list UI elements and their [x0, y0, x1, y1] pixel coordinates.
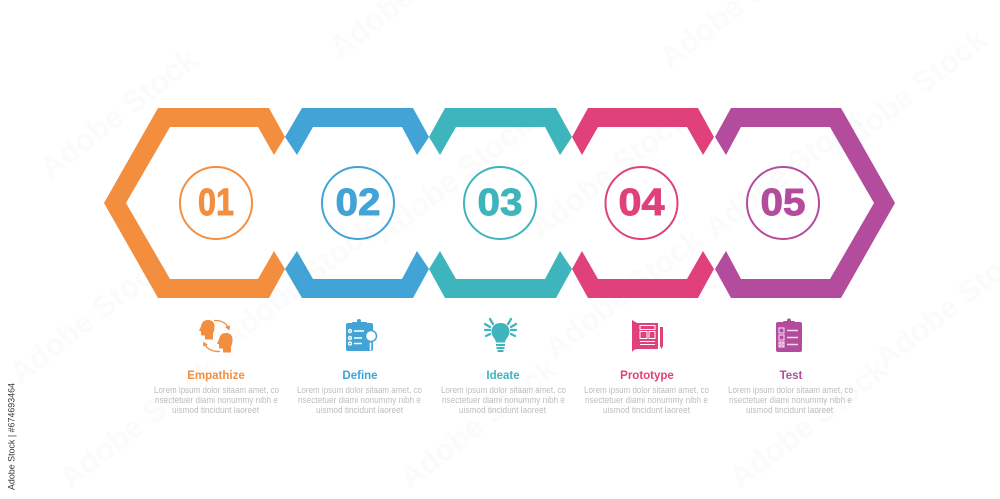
heading: Test: Test: [780, 370, 803, 382]
panel: step 3 Ideate: [429, 108, 572, 415]
body text: Lorem ipsum dolor sitaam amet, co: [154, 385, 279, 395]
watermark: stock overlay: Adobe Stock: [538, 221, 709, 366]
body text: Lorem ipsum dolor sitaam amet, co: [441, 385, 566, 395]
watermark: stock overlay: Adobe Stock: [33, 41, 204, 186]
watermark: stock overlay: Adobe Stock: [723, 351, 894, 496]
heading: Define: Define: [342, 370, 378, 382]
body text: uismod tincidunt laoreet: [316, 405, 403, 415]
side credit: Adobe Stock | #674693464: [6, 383, 18, 490]
watermark: stock overlay: Adobe Stock: [698, 101, 869, 246]
body text: nsectetuer diami nonummy nibh e: [155, 395, 278, 405]
heading: Empathize: Empathize: [187, 370, 245, 382]
number badge 05: 05: [760, 182, 806, 224]
icon: light bulb: [485, 319, 516, 351]
panel: step 4 Prototype: [572, 108, 714, 415]
number badge 03: 03: [478, 182, 522, 224]
icon: clipboard with magnifier: [346, 319, 376, 351]
body text: Lorem ipsum dolor sitaam amet, co: [728, 385, 853, 395]
watermark: stock overlay: Adobe Stock: [368, 106, 539, 251]
heading: Ideate: Ideate: [486, 370, 520, 382]
icon: two heads with arrows: [199, 320, 232, 352]
watermark: stock overlay: Adobe Stock: [53, 351, 224, 496]
number badge 02: 02: [336, 182, 380, 224]
hexagon frame purple: [715, 108, 895, 298]
hexagon frame blue: [285, 108, 429, 298]
number badge 04: [606, 167, 678, 239]
watermark: stock overlay: Adobe Stock: [3, 246, 174, 391]
number badge 01: [180, 167, 252, 239]
number badge 03: [464, 167, 536, 239]
body text: nsectetuer diami nonummy nibh e: [442, 395, 565, 405]
watermark: stock overlay: Adobe Stock: [523, 101, 694, 246]
body text: nsectetuer diami nonummy nibh e: [729, 395, 852, 405]
body text: uismod tincidunt laoreet: [459, 405, 546, 415]
body text: uismod tincidunt laoreet: [172, 405, 259, 415]
panel: step 2 Define: [285, 108, 429, 415]
body text: Lorem ipsum dolor sitaam amet, co: [584, 385, 709, 395]
body text: uismod tincidunt laoreet: [746, 405, 833, 415]
body text: nsectetuer diami nonummy nibh e: [298, 395, 421, 405]
number badge 01: 01: [198, 182, 234, 224]
body text: uismod tincidunt laoreet: [603, 405, 690, 415]
icon: blueprint and pencil: [632, 320, 663, 352]
hexagon frame pink: [572, 108, 714, 298]
heading: Prototype: Prototype: [620, 370, 674, 382]
icon: checklist clipboard: [776, 318, 802, 352]
watermark: stock overlay: Adobe Stock: [393, 351, 564, 496]
watermark: stock overlay: Adobe Stock: [213, 211, 384, 356]
number badge 02: [322, 167, 394, 239]
panel: step 1 Empathize: [104, 108, 285, 415]
watermark: stock overlay: Adobe Stock: [823, 21, 994, 166]
body text: Lorem ipsum dolor sitaam amet, co: [297, 385, 422, 395]
hexagon frame orange: [104, 108, 285, 298]
body text: nsectetuer diami nonummy nibh e: [585, 395, 708, 405]
panel: step 5 Test: [715, 108, 895, 415]
number badge 04: 04: [618, 182, 664, 224]
number badge 05: [747, 167, 819, 239]
hexagon frame teal: [429, 108, 572, 298]
